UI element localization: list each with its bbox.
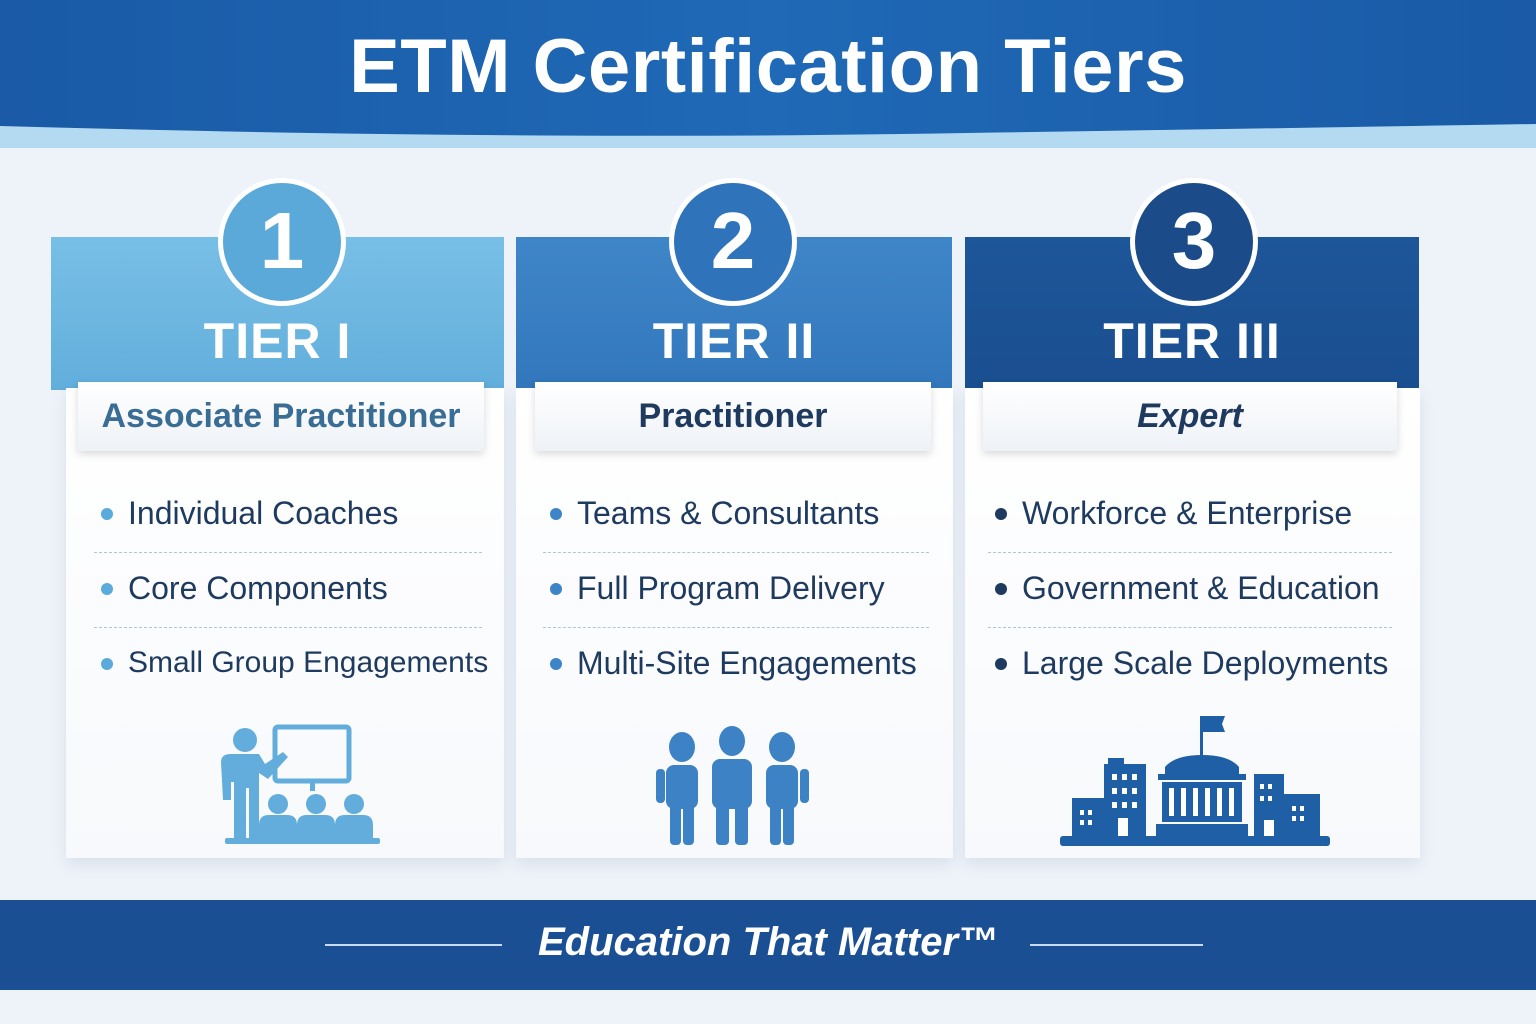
subtitle: Associate Practitioner — [101, 397, 461, 435]
number circle 3: 3 — [1172, 196, 1216, 285]
number circle 1 — [218, 178, 346, 306]
bullet list: Full Program Delivery — [577, 570, 885, 606]
bullet list — [543, 495, 929, 681]
tier heading: TIER II — [653, 313, 815, 369]
subtitle — [983, 382, 1397, 451]
light wave stripe — [0, 124, 1536, 148]
bullet list: Large Scale Deployments — [1022, 645, 1388, 681]
bullet list: Individual Coaches — [128, 495, 398, 531]
bullet list: Small Group Engagements — [128, 646, 488, 679]
panel: tier 1 — [51, 178, 507, 867]
bullet list: Workforce & Enterprise — [1022, 495, 1352, 531]
subtitle — [535, 382, 931, 451]
number circle 2: 2 — [711, 196, 755, 285]
panel: tier 2 — [513, 178, 956, 867]
subtitle: Practitioner — [639, 397, 827, 435]
panel: tier 3 — [962, 178, 1423, 867]
bullet list: Government & Education — [1022, 570, 1380, 606]
number circle 3 — [1130, 178, 1258, 306]
footer banner — [0, 900, 1536, 990]
icon: presenter — [221, 724, 380, 844]
bullet list — [94, 495, 488, 679]
icon: team — [656, 726, 809, 845]
tier heading: TIER I — [204, 313, 351, 369]
bullet list: Core Components — [128, 570, 388, 606]
number circle 2 — [669, 178, 797, 306]
footer tagline: Education That Matter™ — [538, 920, 998, 964]
bullet list: Teams & Consultants — [577, 495, 879, 531]
footer line left — [325, 944, 502, 946]
icon: government buildings — [1060, 716, 1330, 846]
bullet list — [988, 495, 1392, 681]
bullet list: Multi-Site Engagements — [577, 645, 917, 681]
footer line right — [1030, 944, 1203, 946]
tier heading: TIER III — [1103, 313, 1281, 369]
header banner — [0, 0, 1536, 148]
subtitle: Expert — [1137, 397, 1243, 435]
number circle 1: 1 — [260, 196, 304, 285]
title: ETM Certification Tiers — [349, 24, 1187, 109]
subtitle — [78, 382, 484, 451]
